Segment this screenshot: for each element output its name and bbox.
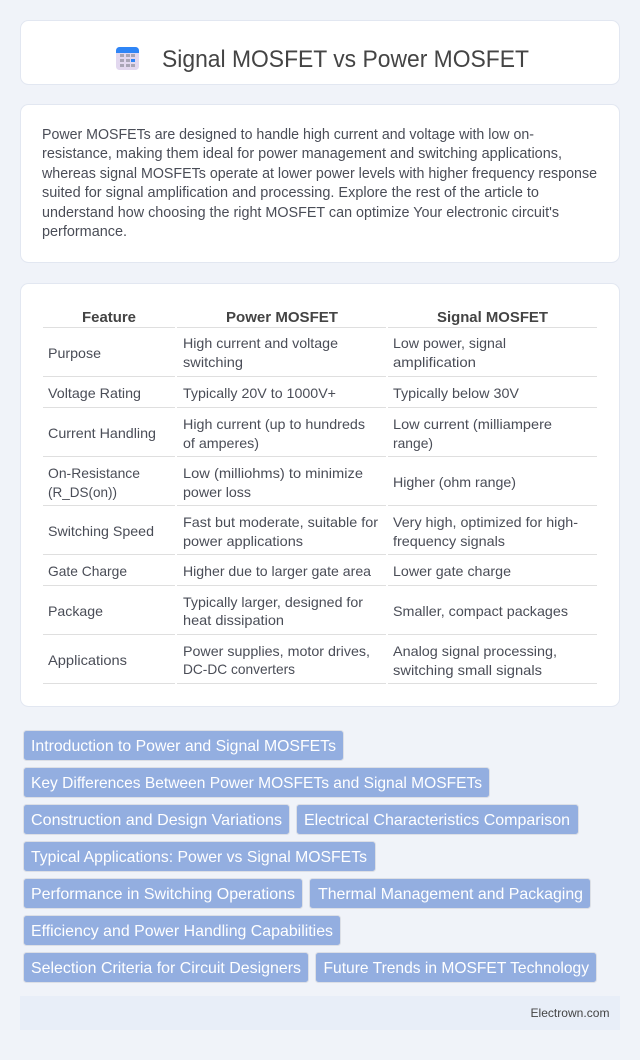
table row: switching speed: Very high, optimized for high- [393, 514, 578, 530]
table row: on-resistance: Low (milliohms) to minimize [183, 465, 363, 481]
tag: electrical characteristics [296, 804, 578, 834]
table row: applications: DC-DC converters [183, 661, 295, 677]
tag: thermal management [310, 878, 590, 908]
table row: applications: Power supplies, motor drives, [183, 643, 370, 659]
table row: on-resistance [43, 465, 597, 506]
table row: applications: switching small signals [393, 662, 542, 678]
table row: purpose [43, 335, 597, 377]
table row: applications: Analog signal processing, [393, 643, 557, 659]
table header row: Power MOSFET [226, 309, 338, 326]
tag: construction [24, 804, 290, 834]
table row: voltage rating: Typically 20V to 1000V+ [183, 385, 336, 401]
table row: on-resistance: power loss [183, 484, 251, 500]
table row: on-resistance: On-Resistance [48, 465, 140, 481]
text block: introduction paragraph [41, 127, 597, 240]
tag: key differences [24, 768, 490, 798]
tag: thermal management: Thermal Management and Packaging [318, 886, 583, 903]
table row: current handling: High current (up to hundreds [183, 416, 365, 432]
table row: current handling: Low current (milliampere [393, 416, 552, 432]
table row: purpose: Purpose [48, 345, 101, 361]
table row: applications: Applications [48, 652, 127, 668]
table row: gate charge: Gate Charge [48, 563, 127, 579]
table row: current handling: Current Handling [48, 425, 156, 441]
table row: package: Smaller, compact packages [393, 603, 568, 619]
panel: title header [20, 20, 620, 84]
table row: gate charge: Higher due to larger gate area [183, 563, 371, 579]
table row: purpose: amplification [393, 354, 476, 370]
table row: voltage rating: Typically below 30V [393, 385, 520, 401]
table row: purpose: Low power, signal [393, 335, 506, 351]
panel: topic tags [24, 730, 596, 982]
table row: switching speed: power applications [183, 533, 303, 549]
table row: gate charge: Lower gate charge [393, 563, 511, 579]
tag: typical applications [24, 842, 376, 872]
text block: introduction paragraph: whereas signal MOSFETs operate at lower power levels with higher frequency response [41, 166, 597, 182]
table row: current handling: of amperes) [183, 435, 259, 451]
table row: package: Package [48, 603, 103, 619]
table row: switching speed [43, 514, 597, 555]
tag: typical applications: Typical Applications: Power vs Signal MOSFETs [31, 849, 367, 866]
icon: calendar grid [116, 47, 139, 70]
table header row: Feature [82, 309, 136, 326]
table row: switching speed: frequency signals [393, 533, 505, 549]
tag: switching performance [24, 878, 302, 908]
tag: introduction [24, 730, 344, 760]
tag: future trends [316, 952, 596, 982]
table row: switching speed: Fast but moderate, suitable for [183, 514, 378, 530]
tag: key differences: Key Differences Between Power MOSFETs and Signal MOSFETs [31, 775, 482, 792]
tag: introduction: Introduction to Power and Signal MOSFETs [31, 738, 336, 755]
table row: switching speed: Switching Speed [48, 523, 154, 539]
table row: current handling [43, 416, 597, 457]
tag: selection criteria: Selection Criteria for Circuit Designers [31, 960, 301, 977]
table row: on-resistance: Higher (ohm range) [393, 474, 516, 490]
tag: efficiency [24, 916, 340, 946]
title: Signal MOSFET vs Power MOSFET [162, 46, 529, 73]
footer [20, 996, 620, 1030]
table row: voltage rating [43, 385, 597, 408]
table row: current handling: range) [393, 435, 433, 451]
table row: package: heat dissipation [183, 612, 284, 628]
tag: future trends: Future Trends in MOSFET Technology [324, 960, 589, 977]
text block: introduction paragraph: performance. [42, 224, 127, 240]
table row: on-resistance: (R_DS(on)) [48, 484, 117, 500]
panel: introduction [20, 104, 620, 262]
table row: voltage rating: Voltage Rating [48, 385, 141, 401]
table header row [43, 309, 597, 328]
text block: introduction paragraph: suited for signal amplification and processing. Explore the rest of the article to [42, 185, 539, 201]
tag: switching performance: Performance in Switching Operations [31, 886, 295, 903]
tag: selection criteria [24, 952, 308, 982]
table row: purpose: High current and voltage [183, 335, 338, 351]
tag: efficiency: Efficiency and Power Handling Capabilities [31, 923, 333, 940]
table row: applications [43, 643, 597, 684]
table row: gate charge [43, 563, 597, 586]
tag: construction: Construction and Design Variations [31, 812, 282, 829]
table row: package [43, 594, 597, 635]
table row: package: Typically larger, designed for [183, 594, 363, 610]
table row: purpose: switching [183, 354, 243, 370]
text block: introduction paragraph: Power MOSFETs are designed to handle high current and voltage with low on- [42, 127, 534, 143]
tag: electrical characteristics: Electrical Characteristics Comparison [304, 812, 570, 829]
panel: comparison table [20, 284, 620, 706]
text block: introduction paragraph: resistance, making them ideal for power management and switching applications, [42, 146, 562, 162]
footer: Electrown.com [530, 1006, 610, 1020]
text block: introduction paragraph: understand how choosing the right MOSFET can optimize Your electronic circuit's [42, 205, 559, 221]
table header row: Signal MOSFET [437, 309, 548, 326]
